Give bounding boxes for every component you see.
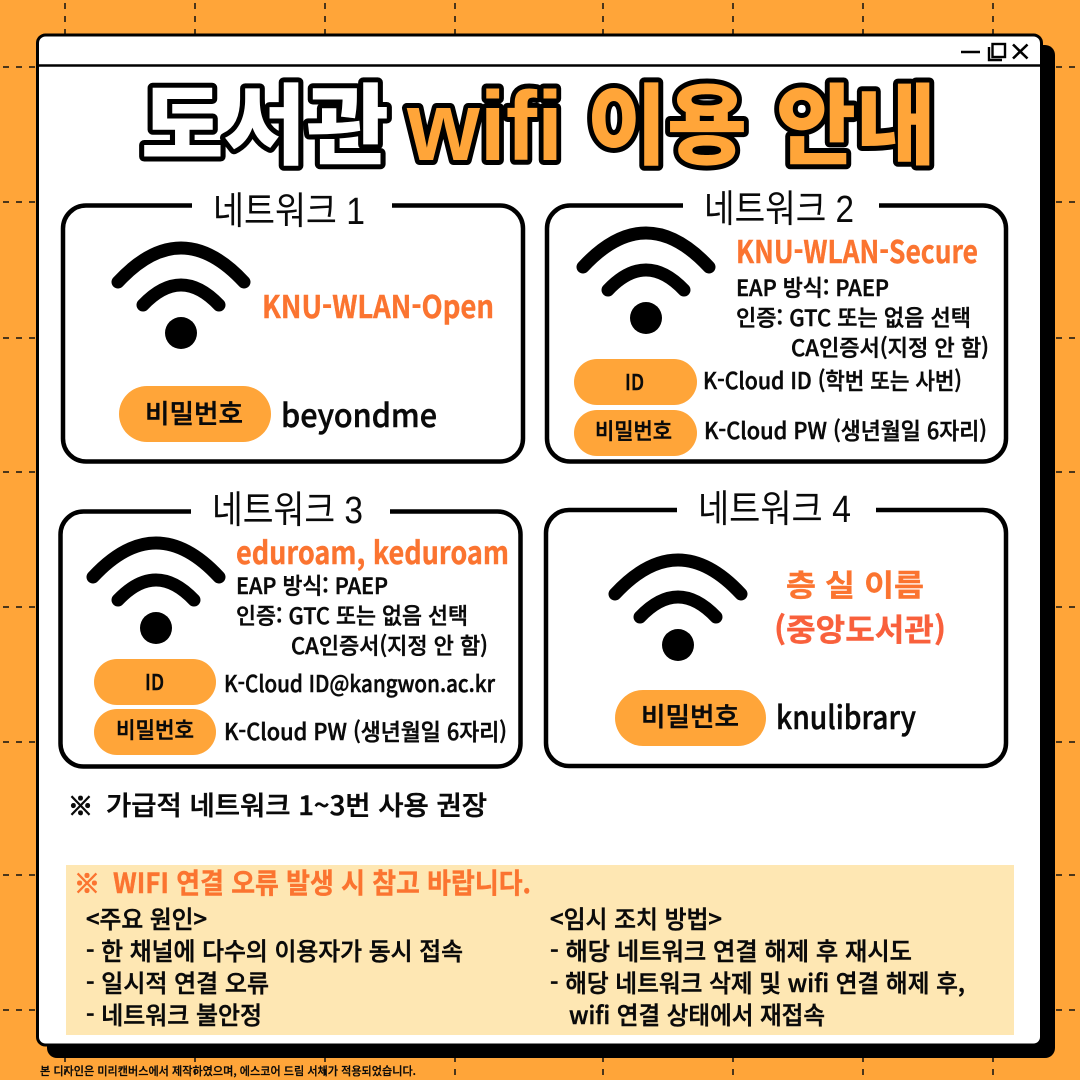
- note heading: WIFI 연결 오류 발생 시 참고 바랍니다.: [113, 862, 531, 902]
- footer credit: 본 디자인은 미리캔버스에서 제작하였으며, 에스코어 드림 서체가 적용되었습니다.: [40, 1063, 416, 1079]
- main causes: - 네트워크 불안정: [86, 997, 262, 1032]
- network 2 settings: [736, 271, 989, 363]
- icon: window controls: [961, 44, 1028, 60]
- main causes: - 한 채널에 다수의 이용자가 동시 접속: [86, 933, 463, 968]
- title: [141, 56, 936, 183]
- ID value 3: K-Cloud ID@kangwon.ac.kr: [224, 665, 496, 699]
- network 2 settings: EAP 방식: PAEP: [736, 271, 889, 303]
- panel: network 1: [63, 191, 523, 462]
- network 3 settings: CA인증서(지정 안 함): [291, 629, 488, 661]
- icon: wifi 4: [615, 560, 741, 661]
- main causes: - 일시적 연결 오류: [86, 965, 269, 1000]
- network name 3: eduroam, keduroam: [236, 528, 509, 573]
- network 2 settings: 인증: GTC 또는 없음 선택: [736, 301, 971, 333]
- main causes: <주요 원인>: [86, 901, 207, 936]
- main causes: [86, 901, 463, 1032]
- network 3 settings: 인증: GTC 또는 없음 선택: [236, 599, 468, 631]
- recommendation note: 가급적 네트워크 1~3번 사용 권장: [106, 784, 487, 823]
- icon: wifi 3: [93, 543, 219, 644]
- heading: network 1: 네트워크 1: [213, 191, 365, 233]
- temporary fixes: - 해당 네트워크 연결 해제 후 재시도: [550, 933, 912, 968]
- network 3 settings: EAP 방식: PAEP: [236, 569, 388, 601]
- panel: network 4: [546, 489, 1006, 766]
- password pill 4: [615, 690, 766, 746]
- pill label ID 2: ID: [625, 365, 644, 397]
- ID pill 3: [94, 659, 216, 705]
- title: 이용: [587, 56, 747, 183]
- password pill 1: [119, 386, 271, 442]
- temporary fixes: <임시 조치 방법>: [550, 901, 722, 936]
- icon: wifi 1: [118, 248, 244, 349]
- password value 1: beyondme: [281, 391, 437, 437]
- panel: troubleshooting note: [66, 862, 1014, 1035]
- pill label ID 3: ID: [145, 665, 164, 697]
- password value 3: K-Cloud PW (생년월일 6자리): [224, 713, 507, 747]
- network name 1: KNU-WLAN-Open: [262, 282, 494, 327]
- pill label 3: 비밀번호: [116, 713, 194, 745]
- network name 4: [774, 561, 946, 650]
- heading: network 4: 네트워크 4: [698, 489, 851, 531]
- pill label 4: 비밀번호: [641, 697, 739, 734]
- title: 안내: [776, 56, 936, 183]
- network name 4: 층 실 이름: [786, 561, 924, 605]
- network name 2: KNU-WLAN-Secure: [736, 227, 978, 272]
- ID value 2: K-Cloud ID (학번 또는 사번): [703, 362, 962, 396]
- temporary fixes: wifi 연결 상태에서 재접속: [569, 997, 825, 1032]
- network 3 settings: [236, 569, 488, 661]
- temporary fixes: [550, 901, 965, 1032]
- password value 4: knulibrary: [776, 693, 916, 739]
- ID pill 2: [574, 359, 697, 405]
- password pill 2: [574, 410, 697, 456]
- title: 도서관: [141, 56, 389, 183]
- recommendation note: ※: [68, 787, 93, 823]
- panel: network 2: [547, 189, 1006, 462]
- note heading: ※: [74, 864, 100, 901]
- temporary fixes: - 해당 네트워크 삭제 및 wifi 연결 해제 후,: [550, 965, 965, 1000]
- password value 2: K-Cloud PW (생년월일 6자리): [704, 412, 987, 446]
- panel: network 3: [60, 490, 520, 766]
- password pill 3: [94, 709, 216, 755]
- pill label 1: 비밀번호: [145, 394, 243, 431]
- pill label 2: 비밀번호: [595, 414, 672, 446]
- network 2 settings: CA인증서(지정 안 함): [791, 331, 989, 363]
- heading: network 3: 네트워크 3: [212, 490, 363, 532]
- icon: wifi 2: [583, 233, 709, 334]
- heading: network 2: 네트워크 2: [704, 189, 854, 231]
- title: wifi: [406, 71, 563, 181]
- network name 4: (중앙도서관): [774, 605, 946, 650]
